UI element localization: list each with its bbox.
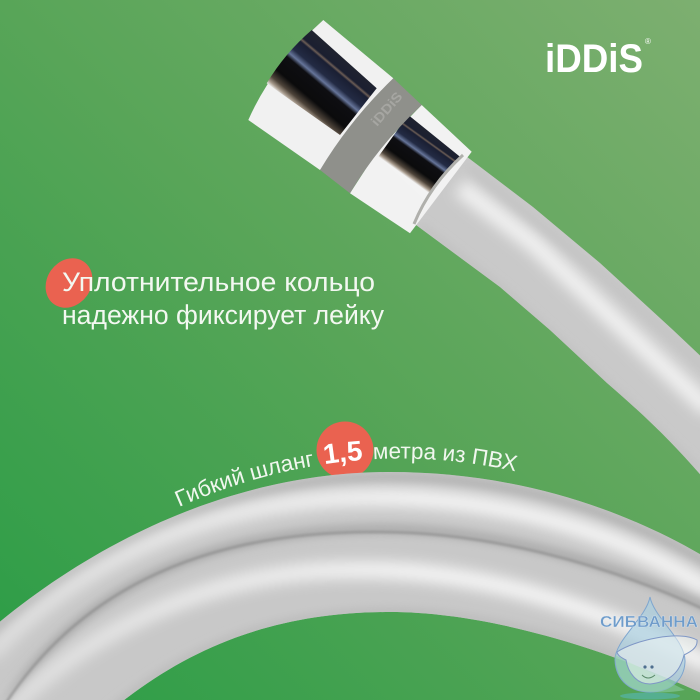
upper white hose from connector <box>416 157 700 474</box>
grey seal ring <box>320 78 422 193</box>
teal base <box>620 692 680 700</box>
watermark logo <box>600 597 698 700</box>
brand logo: ® <box>645 37 651 46</box>
curved hose length caption: метра из ПВХ <box>374 446 518 472</box>
brand name: СИБВАННА <box>600 614 698 631</box>
lower coiled white hose <box>0 460 700 700</box>
drop lower tint <box>615 655 685 692</box>
curved hose length caption <box>174 440 518 506</box>
bathtub <box>617 636 697 684</box>
chrome connector with seal ring <box>248 20 472 233</box>
red accent blob <box>36 249 102 317</box>
bathtub face <box>642 665 655 678</box>
connector right section <box>350 105 472 233</box>
red circle behind 1,5 <box>316 422 374 478</box>
water drop <box>615 597 685 692</box>
callout: sealing ring text <box>36 249 385 330</box>
brand logo: iDDiS <box>545 37 643 81</box>
metal collar <box>414 155 463 224</box>
text line two: надежно фиксирует лейку <box>62 300 385 330</box>
curved hose length caption: Гибкий шланг <box>174 454 312 506</box>
text line one: Уплотнительное кольцо <box>62 267 375 297</box>
curved hose length caption: 1,5 <box>324 440 362 466</box>
ring engraved logo: iDDiS <box>368 89 406 129</box>
connector left section <box>248 20 393 170</box>
